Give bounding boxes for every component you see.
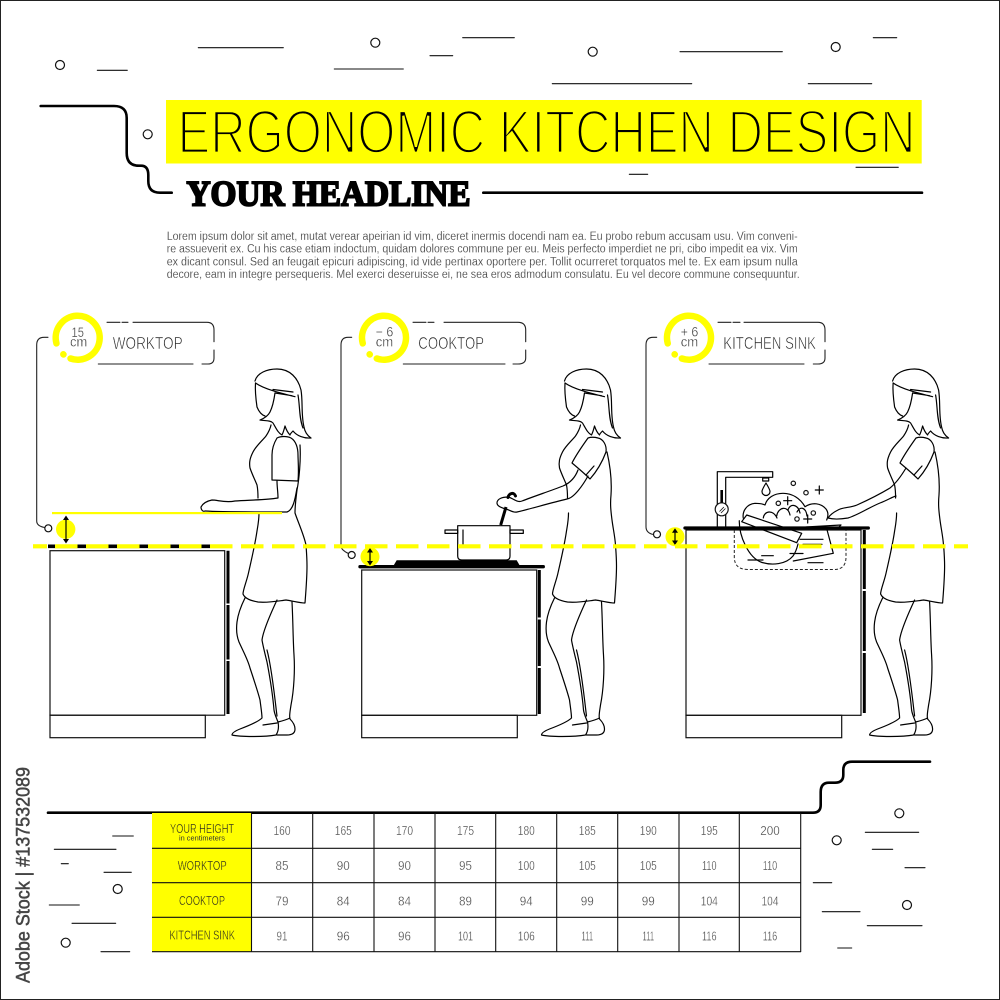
height marker: cooktop	[360, 547, 380, 566]
connector: sink	[646, 337, 660, 538]
intro paragraph: decore, eam in integre persequeris. Mel exerci deseruisse ei, ne sea eros admodum consulatu. Eu vel decore commune consequuntur.	[167, 269, 800, 281]
yellow reference height line	[33, 544, 968, 548]
row: worktop: 105	[579, 858, 596, 873]
row: kitchen sink	[276, 929, 777, 944]
row: your height: 185	[579, 823, 596, 838]
row: cooktop: 84	[398, 893, 411, 908]
title banner	[166, 98, 922, 166]
subheading: YOUR HEADLINE	[186, 174, 470, 214]
row: worktop: 100	[518, 858, 535, 873]
row: kitchen sink: 91	[276, 929, 288, 944]
row: your height: 170	[396, 823, 413, 838]
badge: 15 cm: 15	[72, 325, 84, 340]
label box: worktop: WORKTOP	[113, 333, 183, 353]
table header column	[152, 813, 251, 952]
row: cooktop: 99	[581, 893, 594, 908]
badge: -6 cm: − 6	[376, 325, 393, 340]
cabinet: worktop	[48, 546, 228, 738]
faucet	[715, 472, 773, 527]
row: worktop	[276, 858, 777, 873]
row: your height: 200	[760, 823, 780, 838]
row: worktop: 90	[398, 858, 411, 873]
cabinet: cooktop	[360, 567, 543, 738]
badge: +6 cm: + 6	[681, 325, 698, 340]
label box: cooktop: COOKTOP	[418, 333, 484, 353]
row: cooktop: 84	[337, 893, 350, 908]
row: cooktop: 104	[701, 893, 718, 908]
row: kitchen sink: 111	[643, 929, 654, 944]
intro paragraph	[167, 231, 800, 281]
row: your height	[274, 823, 780, 838]
badge: 15 cm	[56, 316, 100, 360]
height marker: worktop	[56, 516, 75, 544]
row: cooktop: 89	[459, 893, 472, 908]
row labels: in centimeters	[179, 835, 226, 842]
row: cooktop: 99	[642, 893, 655, 908]
badge: 15 cm: cm	[70, 335, 87, 350]
decorative dots and dashes: top	[56, 38, 898, 174]
row: cooktop: 104	[762, 893, 778, 908]
badge: -6 cm: cm	[376, 335, 393, 350]
row: worktop: 110	[702, 858, 717, 873]
panel: kitchen sink	[646, 316, 949, 738]
connector: worktop	[37, 337, 52, 532]
row labels: YOUR HEIGHT	[170, 821, 234, 836]
table: heights	[152, 813, 801, 952]
row: worktop: 90	[337, 858, 350, 873]
table grid	[152, 813, 801, 952]
row: your height: 195	[701, 823, 718, 838]
row: kitchen sink: 96	[337, 929, 350, 944]
intro paragraph: re assueverit ex. Cu his case etiam indoctum, quidam dolores commune per eu. Meis perfecto imperdiet ne pri, cibo impedit ea vix. Vim	[167, 244, 798, 256]
intro paragraph: ex dicant consul. Sed an feugait epicuri adipiscing, id vide pertinax oportere per. Tollit ocurreret torquatos mel te. Ex eam ipsum nulla	[167, 256, 798, 268]
decorative dots and dashes: bottom left	[49, 836, 133, 952]
woman at worktop	[201, 369, 311, 736]
row: kitchen sink: 116	[763, 929, 777, 944]
side credit text: Adobe Stock | #137532089	[14, 767, 34, 983]
panel: worktop	[37, 316, 311, 738]
row: your height: 160	[274, 823, 290, 838]
row labels	[169, 821, 235, 942]
decorative dots and dashes: bottom right	[813, 809, 925, 948]
cabinet: sink	[685, 528, 868, 738]
row labels: WORKTOP	[178, 858, 227, 873]
hob and pot	[393, 493, 523, 566]
heading rule with stepped curve	[41, 106, 922, 193]
badge: -6 cm	[362, 316, 406, 360]
intro paragraph: Lorem ipsum dolor sit amet, mutat verear apeirian id vim, diceret inermis docendi nam ea. Eu probo rebum accusam usu. Vim conveni-	[167, 231, 798, 243]
row: worktop: 85	[276, 858, 288, 873]
row: your height: 190	[640, 823, 657, 838]
row labels: COOKTOP	[179, 893, 225, 908]
connector: cooktop	[341, 337, 355, 558]
sink with dishes and bubbles	[734, 481, 846, 570]
badge: +6 cm: cm	[681, 335, 698, 350]
row: kitchen sink: 111	[582, 929, 593, 944]
label box: cooktop	[403, 322, 526, 364]
label box: sink: KITCHEN SINK	[723, 333, 816, 353]
sleeve and arm: cooktop	[497, 437, 616, 545]
row: kitchen sink: 96	[398, 929, 411, 944]
stepped rule above table	[48, 762, 930, 813]
row: your height: 180	[518, 823, 535, 838]
sleeve and arm: sink	[828, 437, 944, 545]
row: kitchen sink: 116	[702, 929, 717, 944]
row: cooktop: 94	[520, 893, 533, 908]
row: cooktop	[276, 893, 778, 908]
woman at cooktop	[542, 369, 620, 736]
row: worktop: 95	[459, 858, 472, 873]
worktop height line	[52, 512, 282, 514]
label box: worktop	[98, 322, 214, 364]
badge: +6 cm	[667, 316, 711, 360]
panel: cooktop	[341, 316, 620, 738]
row: cooktop: 79	[276, 893, 288, 908]
row: your height: 175	[457, 823, 474, 838]
row: worktop: 105	[640, 858, 657, 873]
row: kitchen sink: 101	[458, 929, 473, 944]
woman at sink	[870, 369, 949, 736]
row: worktop: 110	[763, 858, 777, 873]
height marker: sink	[666, 527, 684, 546]
row: your height: 165	[335, 823, 352, 838]
row: kitchen sink: 106	[518, 929, 535, 944]
row labels: KITCHEN SINK	[169, 927, 235, 942]
label box: sink	[709, 322, 825, 364]
